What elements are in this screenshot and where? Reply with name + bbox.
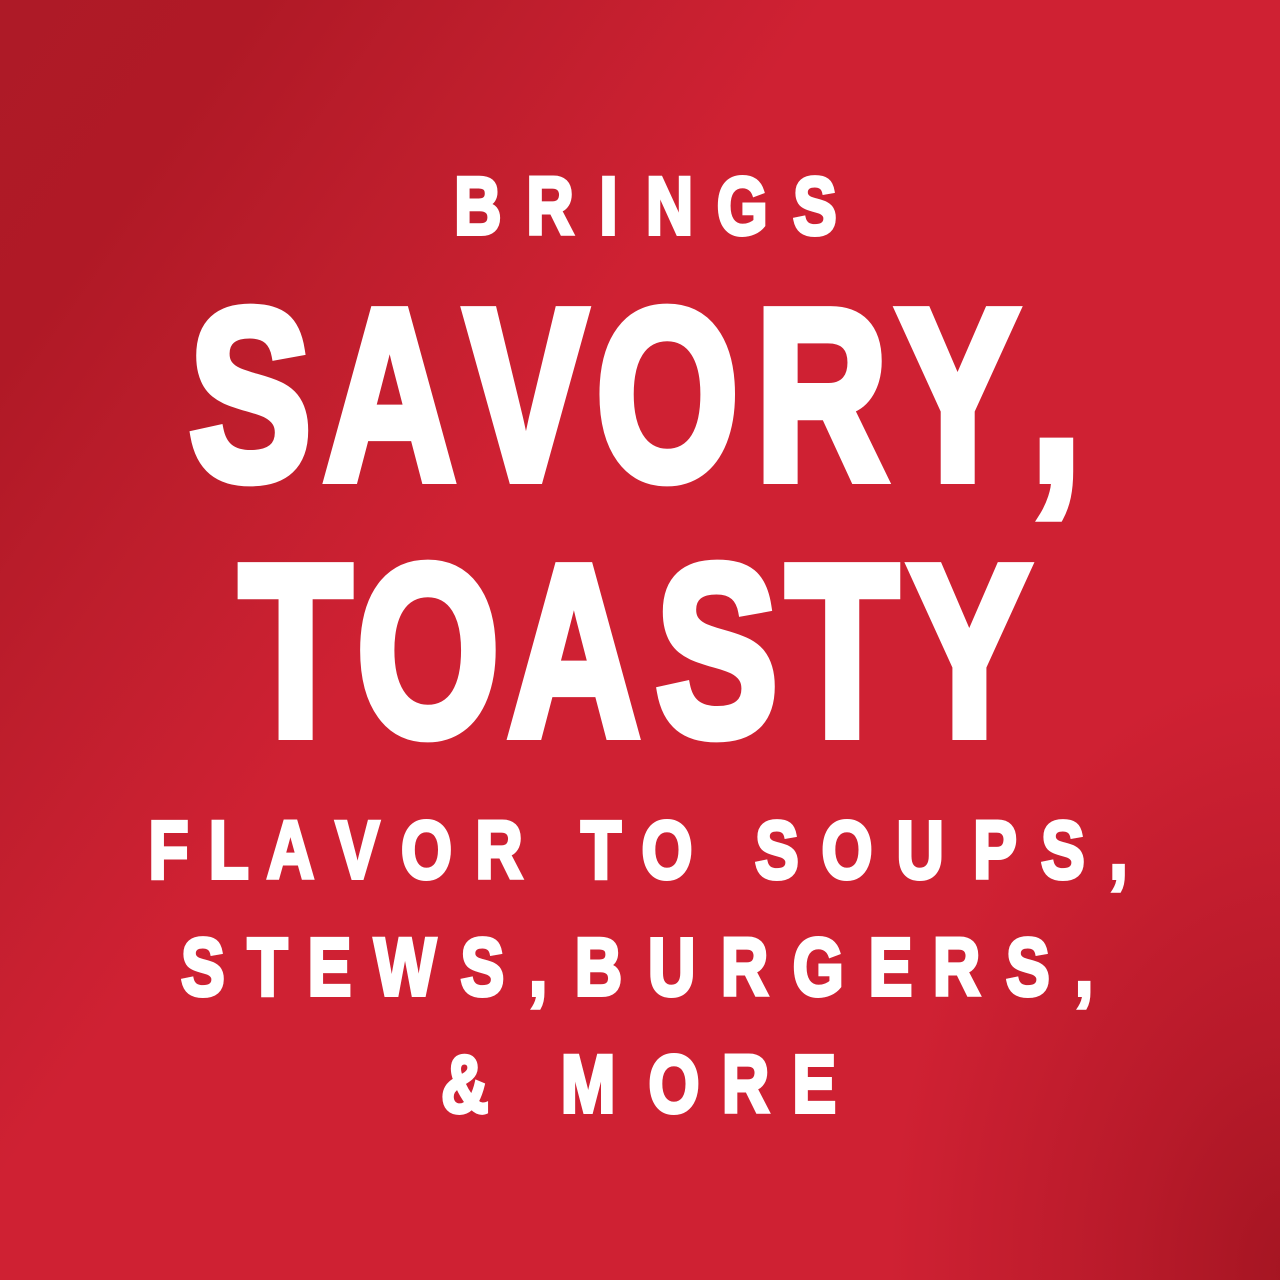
text: and more: & MORE xyxy=(441,1038,836,1130)
heading: brings: BRINGS xyxy=(454,160,837,252)
heading: toasty: TOASTY xyxy=(239,514,1031,787)
heading: savory: SAVORY, xyxy=(189,258,1082,531)
text: stews burgers: STEWS,BURGERS, xyxy=(181,921,1093,1013)
text: flavor to soups: FLAVOR TO SOUPS, xyxy=(149,804,1128,896)
